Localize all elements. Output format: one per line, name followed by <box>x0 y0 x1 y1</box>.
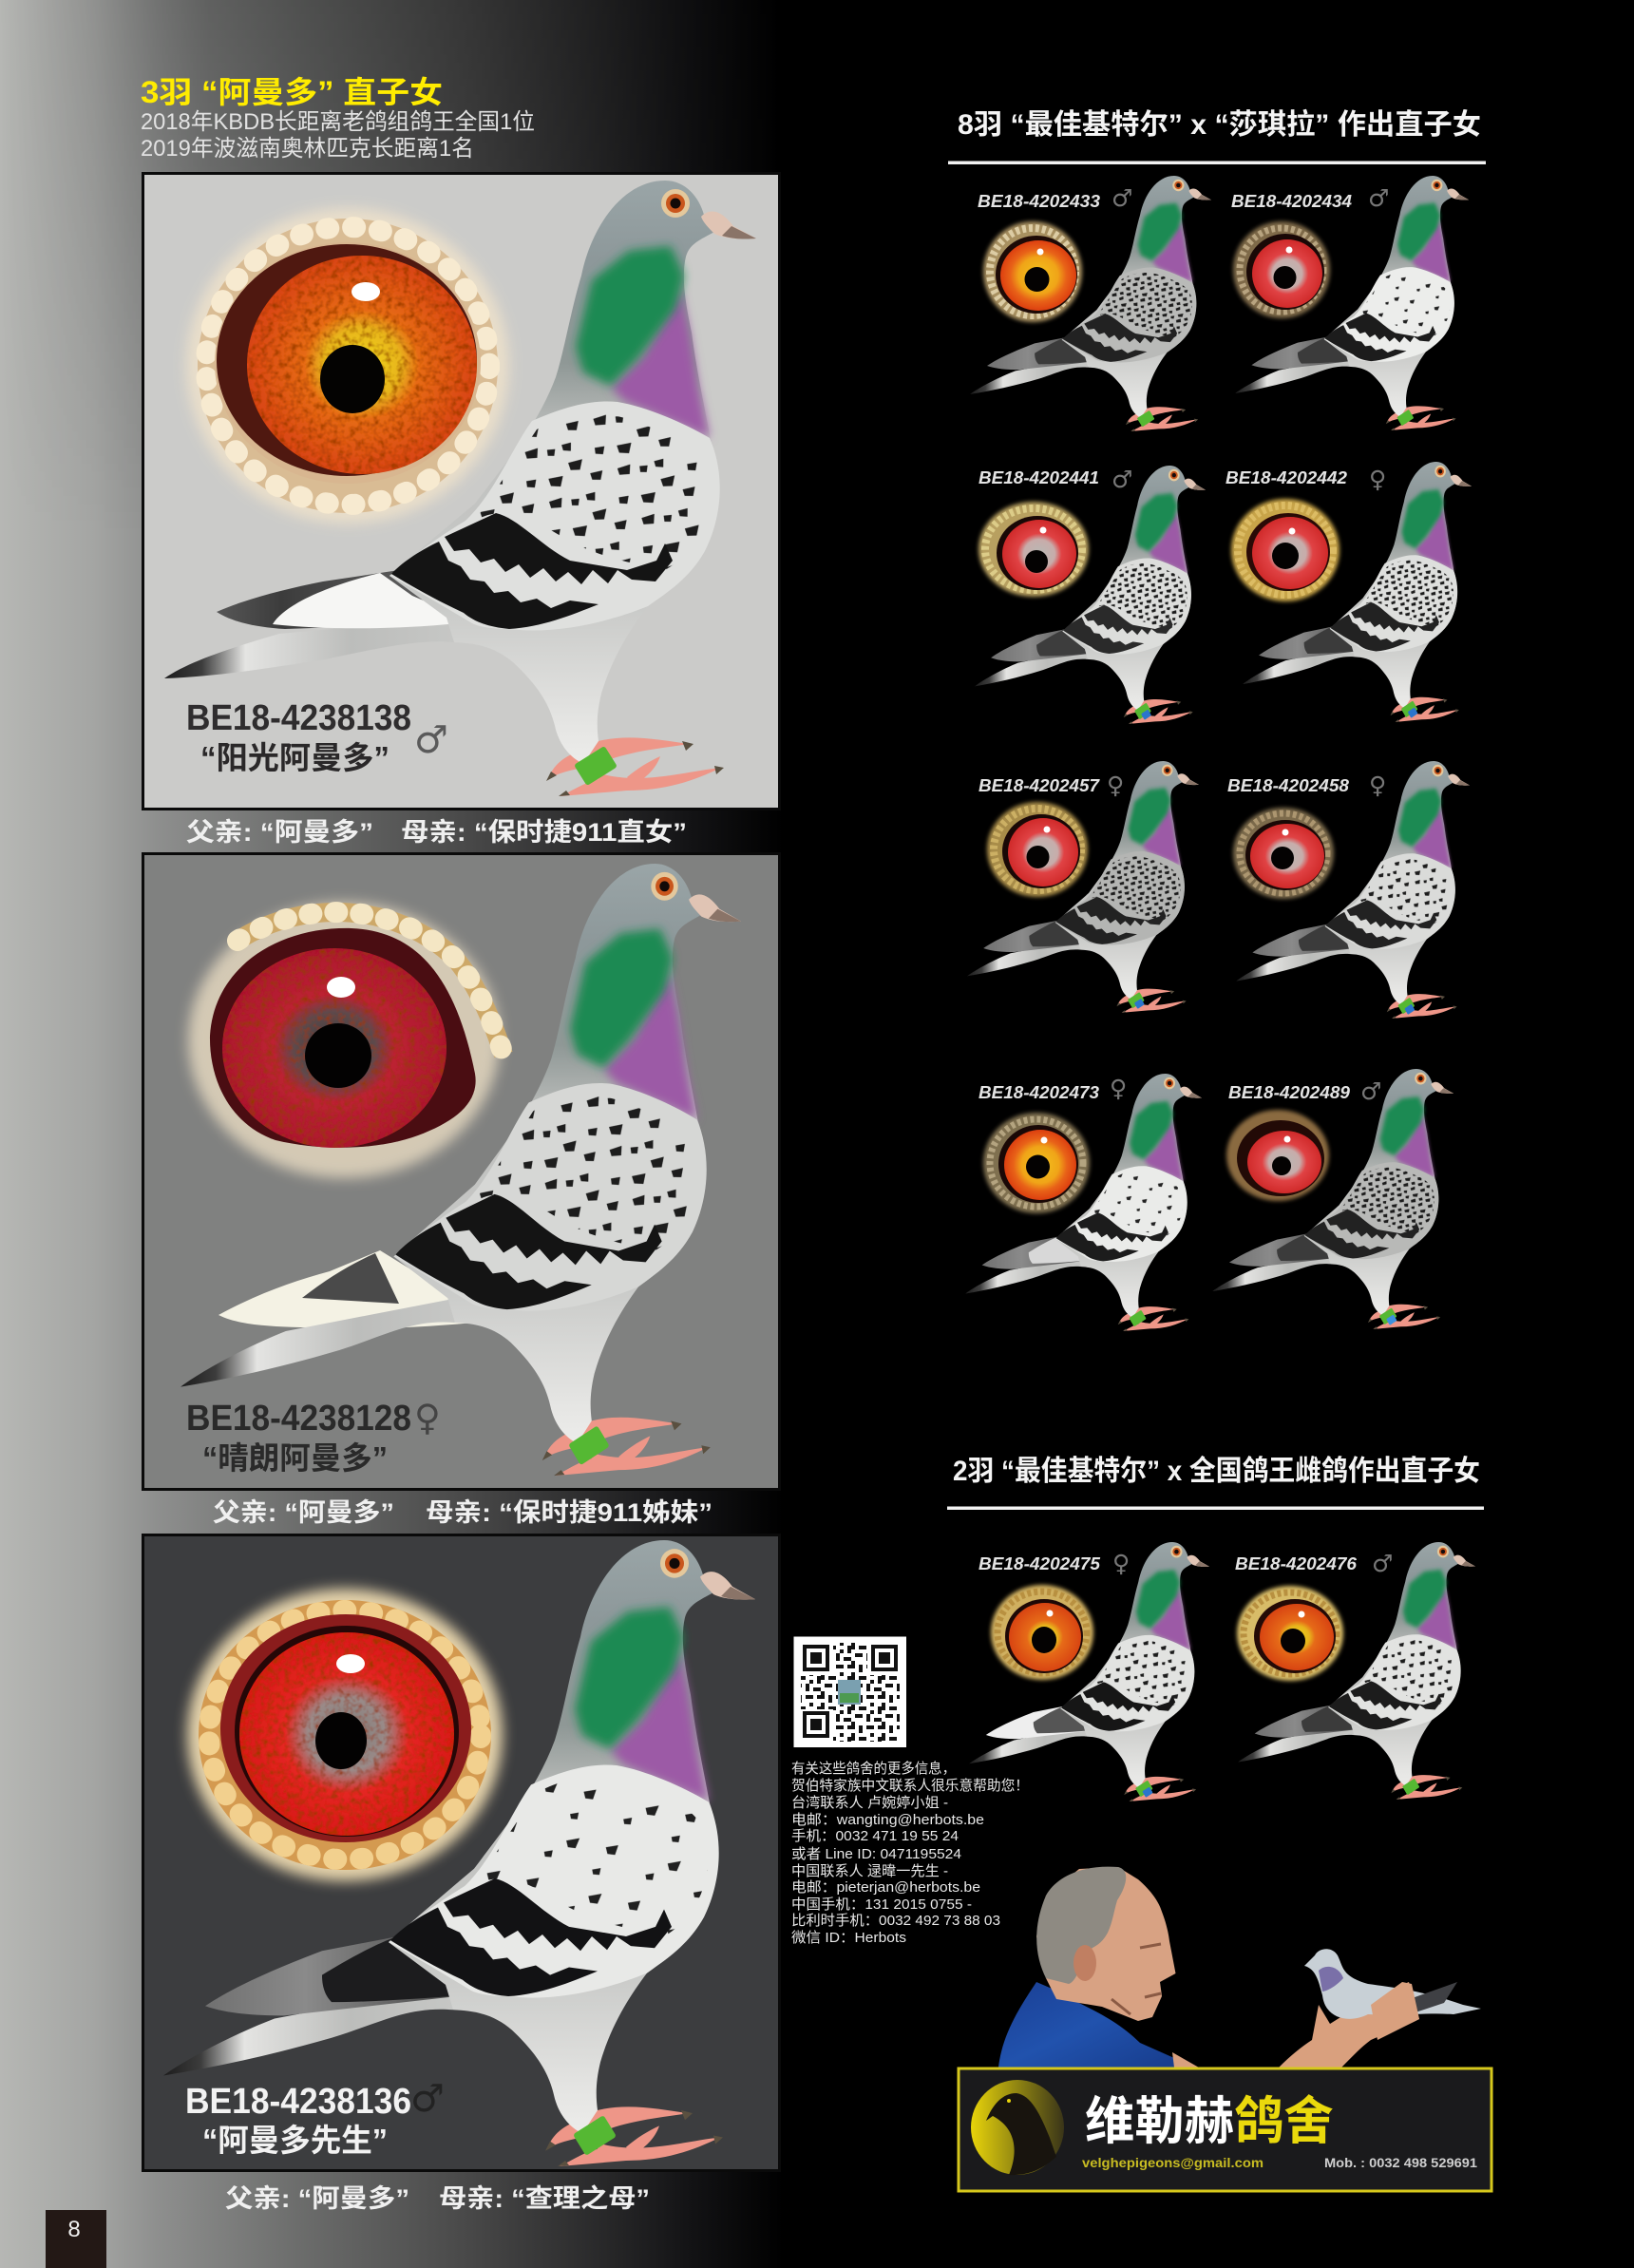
ring number: BE18-4202433 <box>978 192 1100 211</box>
sex symbol: ♀ <box>1112 1550 1130 1577</box>
sex symbol: ♂ <box>1372 1550 1393 1577</box>
eye <box>991 1585 1093 1680</box>
heading: 8 children: 8羽 “最佳基特尔” x “莎琪拉” 作出直子女 <box>958 109 1481 141</box>
panel background <box>142 173 779 810</box>
contact text block: 中国联系人 逯暐一先生 - <box>791 1863 948 1879</box>
caption: parents of 4238138 <box>186 818 687 847</box>
caption: parents of 4238128: 母亲: “保时捷911姊妹” <box>426 1498 712 1527</box>
sex symbol: ♂ <box>1368 184 1389 212</box>
hand on pigeon <box>1371 1982 1419 2040</box>
caption: parents of 4238128 <box>213 1498 712 1527</box>
email: velghepigeons@gmail.com <box>1082 2155 1264 2170</box>
ring number: BE18-4202457 <box>978 776 1100 795</box>
contact text block: 电邮：pieterjan@herbots.be <box>791 1879 980 1896</box>
pigeon <box>970 176 1211 431</box>
ring number: BE18-4202473 <box>978 1083 1099 1102</box>
pigeon name: “阳光阿曼多” <box>200 740 390 775</box>
panel: BE18-4238128 <box>142 853 779 1490</box>
mobile: Mob. : 0032 498 529691 <box>1324 2155 1477 2170</box>
contact text block: 中国手机：131 2015 0755 - <box>791 1896 972 1913</box>
icon: female symbol: ♀ <box>414 1397 441 1439</box>
panel background <box>142 853 779 1490</box>
sex symbol: ♂ <box>1360 1077 1381 1105</box>
subtitle line 2: 2019年波滋南奥林匹克长距离1名 <box>141 136 474 162</box>
pigeon <box>1212 1069 1454 1329</box>
heading: 8 children <box>948 109 1486 164</box>
card: BE18-4202433 <box>970 176 1211 431</box>
sex symbol: ♀ <box>1369 772 1386 799</box>
logo icon: pigeon in circle <box>971 2080 1064 2175</box>
eye <box>983 221 1082 322</box>
eye <box>1233 221 1330 318</box>
ring number: BE18-4202458 <box>1227 776 1349 795</box>
contact text block: 手机：0032 471 19 55 24 <box>791 1828 959 1844</box>
contact text block: 有关这些鸽舍的更多信息， <box>791 1761 956 1777</box>
card: BE18-4202434 <box>1231 176 1469 430</box>
head <box>1036 1867 1176 2021</box>
caption: parents of 4238136 <box>225 2184 650 2213</box>
ring number: BE18-4202434 <box>1231 192 1352 211</box>
facial shadows <box>1112 1944 1161 2014</box>
pigeon <box>965 1074 1202 1331</box>
eye <box>987 802 1088 897</box>
ring number: BE18-4202441 <box>978 468 1099 487</box>
shirt <box>998 1982 1178 2068</box>
pigeon <box>1238 1542 1475 1800</box>
eye <box>1233 808 1334 899</box>
icon: large eye 1 <box>186 208 509 524</box>
card: BE18-4202475 <box>969 1542 1209 1801</box>
card: BE18-4202457 <box>967 761 1199 1013</box>
card: BE18-4202458 <box>1227 761 1470 1019</box>
ear <box>1074 1945 1096 1981</box>
sex symbol: ♂ <box>1112 466 1132 493</box>
brand name <box>1085 2093 1334 2150</box>
ring number: BE18-4202476 <box>1235 1554 1358 1573</box>
pigeon <box>969 1542 1209 1801</box>
brand name: 维勒赫 <box>1085 2093 1234 2150</box>
caption: parents of 4238128: 父亲: “阿曼多” <box>213 1498 394 1527</box>
pigeon 2 <box>180 864 741 1476</box>
sex symbol: ♀ <box>1107 772 1124 799</box>
panel: BE18-4238138 <box>142 173 779 810</box>
contact text block <box>791 1761 1029 1946</box>
contact text block: 台湾联系人 卢婉婷小姐 - <box>791 1795 948 1811</box>
heading: 2 children: 2羽 “最佳基特尔” x 全国鸽王雌鸽作出直子女 <box>953 1456 1480 1487</box>
ring number: BE18-4202489 <box>1228 1083 1350 1102</box>
contact text block: 比利时手机：0032 492 73 88 03 <box>791 1913 1000 1929</box>
pigeon <box>1235 176 1469 430</box>
pigeon name: “晴朗阿曼多” <box>202 1440 388 1476</box>
eye <box>983 1113 1090 1213</box>
pigeon 1 <box>164 181 756 796</box>
ring number: BE18-4202475 <box>978 1554 1101 1573</box>
ring number: BE18-4238128 <box>186 1399 411 1439</box>
pigeon <box>975 466 1206 724</box>
heading: 2 children <box>947 1456 1484 1510</box>
icon: male symbol: ♂ <box>414 718 448 762</box>
caption: parents of 4238138: 母亲: “保时捷911直女” <box>401 818 687 847</box>
page number box <box>46 2210 106 2268</box>
pigeon <box>1236 761 1470 1019</box>
near arm <box>1172 2052 1199 2068</box>
hair <box>1036 1867 1126 1984</box>
yellow heading: 3羽 “阿曼多” 直子女 <box>141 75 443 109</box>
contact text block: 电邮：wangting@herbots.be <box>791 1812 984 1828</box>
sex symbol: ♀ <box>1110 1075 1127 1102</box>
pigeon <box>1243 462 1472 722</box>
card: BE18-4202473 <box>965 1074 1202 1331</box>
pigeon name: “阿曼多先生” <box>202 2123 388 2158</box>
contact text block: 贺伯特家族中文联系人很乐意帮助您！ <box>791 1777 1029 1794</box>
panel background <box>142 1535 779 2170</box>
card: BE18-4202442 <box>1226 462 1472 722</box>
caption: parents of 4238138: 父亲: “阿曼多” <box>186 818 373 847</box>
icon: large eye 3 <box>187 1589 503 1881</box>
held pigeon <box>1304 1949 1481 2019</box>
caption: parents of 4238136: 母亲: “查理之母” <box>439 2184 650 2213</box>
brand name: 鸽舍 <box>1234 2093 1334 2150</box>
caption: parents of 4238136: 父亲: “阿曼多” <box>225 2184 409 2213</box>
eye <box>1237 1586 1343 1681</box>
ring number: BE18-4238138 <box>186 698 411 738</box>
contact text block: 微信 ID：Herbots <box>791 1930 906 1946</box>
ring number: BE18-4238136 <box>185 2082 411 2122</box>
eye <box>1231 499 1340 601</box>
panel: BE18-4238136 <box>142 1535 779 2170</box>
eye <box>1226 1110 1329 1201</box>
icon: male symbol: ♂ <box>410 2077 445 2121</box>
icon: large eye 2 <box>188 903 504 1178</box>
page number box: 8 <box>67 2217 81 2242</box>
title block: 3 direct children of Amando <box>141 75 535 162</box>
wing tip: white primary feathers <box>218 1250 494 1328</box>
contact text block: 或者 Line ID: 0471195524 <box>791 1846 961 1862</box>
card: BE18-4202441 <box>975 466 1206 724</box>
card: BE18-4202489 <box>1212 1069 1454 1329</box>
arm and hands <box>1279 1982 1419 2068</box>
eye <box>978 502 1089 597</box>
ring number: BE18-4202442 <box>1226 468 1347 487</box>
pigeon <box>967 761 1199 1013</box>
man holding pigeon <box>998 1867 1481 2068</box>
logo banner <box>959 2068 1492 2191</box>
card: BE18-4202476 <box>1235 1542 1475 1800</box>
pigeon 3 <box>163 1540 755 2166</box>
sex symbol: ♂ <box>1112 184 1132 212</box>
subtitle line 1: 2018年KBDB长距离老鸽组鸽王全国1位 <box>141 109 535 135</box>
icon: QR code <box>794 1636 906 1747</box>
sex symbol: ♀ <box>1369 466 1386 493</box>
